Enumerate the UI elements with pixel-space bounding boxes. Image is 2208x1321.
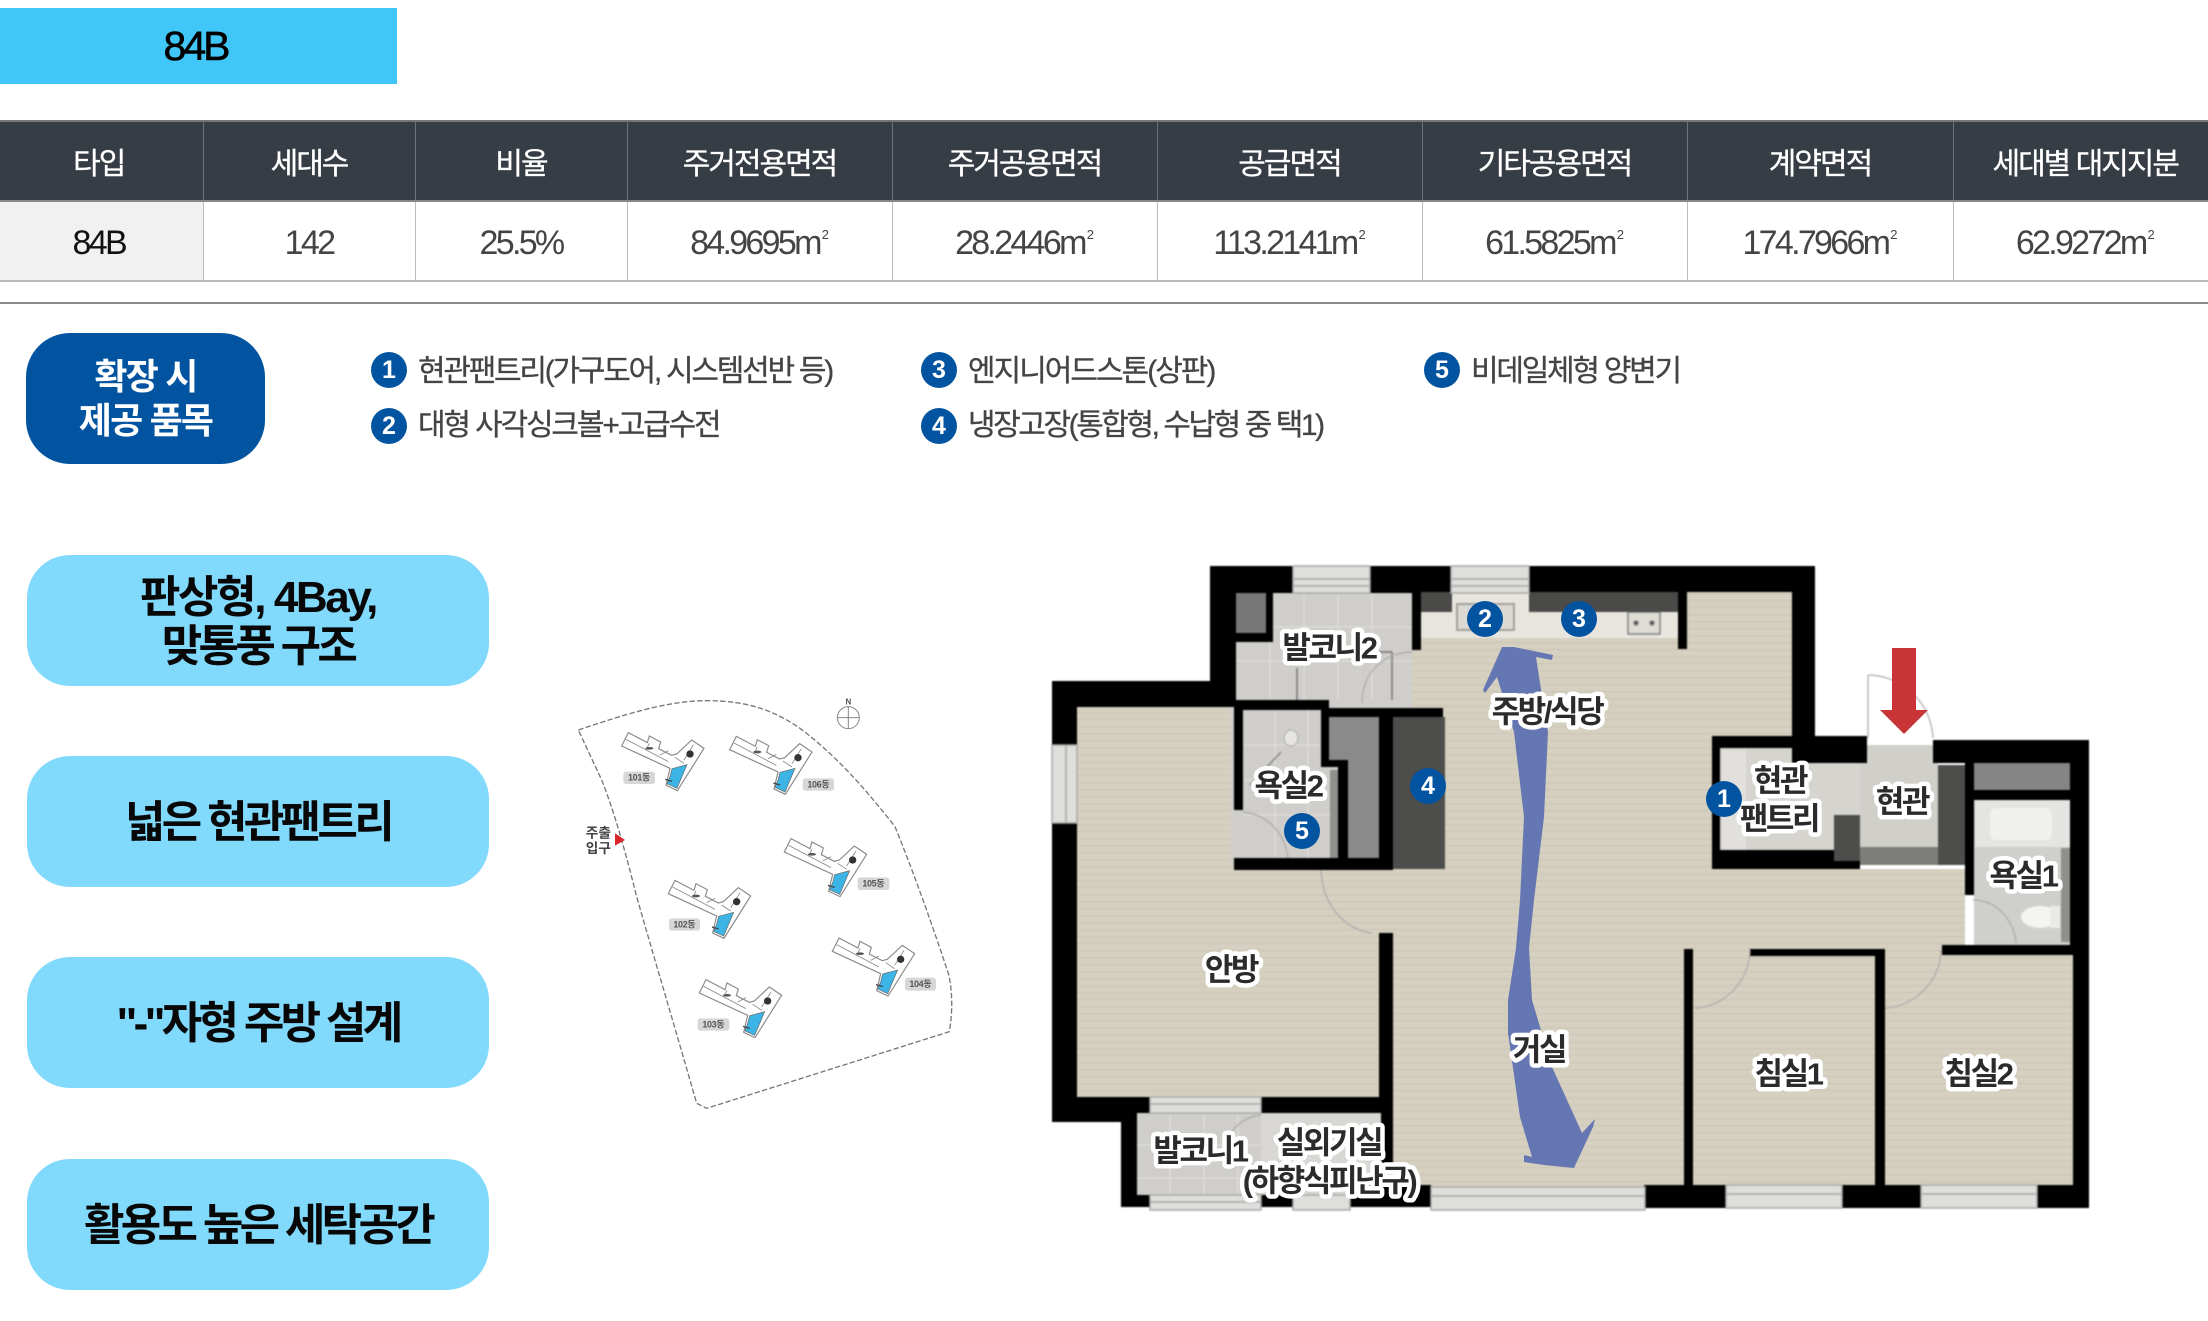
building label 101: 101동 — [628, 773, 650, 783]
area table: 28.2446m2 — [955, 224, 1094, 262]
entrance shoe cabinet — [1938, 765, 1965, 865]
marker 5 — [1284, 813, 1320, 849]
building label 102 — [669, 918, 700, 931]
main entrance label: 주출 — [586, 825, 611, 840]
feature pill: kitchen — [27, 957, 489, 1088]
pantry cabinet — [1834, 815, 1860, 861]
counter — [1420, 592, 1680, 638]
room labels: 안방 — [1205, 952, 1259, 988]
feature pill: laundry — [27, 1159, 489, 1290]
feature pill: kitchen: "-"자형 주방 설계 — [116, 999, 400, 1048]
text: 엔지니어드스톤(상판) — [968, 355, 1214, 388]
area table: 세대별 대지지분 — [1992, 148, 2178, 181]
text: 현관팬트리(가구도어, 시스템선반 등) — [418, 355, 832, 388]
legend item 3 — [921, 352, 1215, 388]
entrance floor — [1860, 745, 1938, 847]
text: 5 — [1435, 356, 1449, 384]
marker 2 — [1467, 601, 1503, 637]
area table — [0, 120, 2208, 282]
refrigerator cabinet — [1393, 717, 1445, 869]
badge: items provided with extension — [26, 333, 265, 464]
legend item 5 — [1424, 352, 1680, 388]
building label 105: 105동 — [862, 879, 884, 889]
site boundary — [578, 701, 952, 1108]
feature pill: layout — [27, 555, 489, 686]
balcony 1 floor — [1137, 1113, 1261, 1198]
marker 3 — [1561, 601, 1597, 637]
entrance marker — [615, 833, 625, 846]
building label 106 — [803, 778, 834, 791]
room labels: 발코니2 — [1282, 630, 1377, 666]
marker 4 — [1410, 768, 1446, 804]
marker 1 — [1706, 781, 1742, 817]
building label 102: 102동 — [673, 919, 695, 929]
area table: 25.5% — [480, 224, 562, 262]
room labels: 주방/식당 — [1492, 694, 1604, 730]
feature pill: pantry: 넓은 현관팬트리 — [125, 798, 391, 847]
area table: 62.9272m2 — [2016, 224, 2155, 262]
type tab: 84B: 84B — [164, 23, 227, 69]
area table: 계약면적 — [1769, 148, 1871, 181]
feature pill: pantry — [27, 756, 489, 887]
building label 101 — [623, 772, 655, 784]
balcony 2 floor — [1236, 593, 1412, 708]
area table: 세대수 — [271, 148, 347, 181]
marker 1: 1 — [1717, 785, 1731, 813]
windows — [1052, 566, 2037, 1210]
legend item 1 — [371, 352, 832, 388]
text: 냉장고장(통합형, 수납형 중 택1) — [968, 409, 1323, 442]
sink — [1457, 604, 1514, 630]
legend item 4 — [921, 408, 1324, 444]
marker 3: 3 — [1572, 605, 1586, 633]
main entrance label — [586, 825, 611, 856]
room labels: 침실1 — [1754, 1056, 1824, 1092]
bathroom 2 floor — [1230, 708, 1340, 860]
area table: 84.9695m2 — [690, 224, 829, 262]
building label 105 — [858, 877, 889, 890]
room labels: 팬트리 — [1740, 802, 1818, 836]
room labels: (하향식피난구) — [1243, 1164, 1416, 1198]
feature pill: layout: 판상형, 4Bay, — [140, 572, 376, 622]
room labels: 실외기실 — [1277, 1126, 1381, 1160]
area table: 비율 — [495, 148, 547, 181]
legend item 2 — [371, 408, 720, 444]
text: 4 — [932, 412, 946, 440]
main entrance label: 입구 — [586, 841, 611, 856]
cooktop — [1628, 612, 1660, 634]
text: 3 — [932, 356, 946, 384]
room labels: 현관 — [1754, 764, 1808, 798]
room labels: 현관 — [1876, 784, 1930, 820]
building label 103 — [698, 1018, 729, 1031]
entry arrow — [1880, 648, 1928, 734]
floor plan — [1052, 566, 2089, 1210]
marker 5: 5 — [1295, 817, 1309, 845]
buildings — [622, 733, 915, 1038]
area table: 기타공용면적 — [1478, 148, 1631, 181]
marker 2: 2 — [1478, 605, 1492, 633]
building label 104: 104동 — [909, 979, 931, 989]
area table: 142 — [285, 224, 333, 262]
bathroom 1 floor — [1974, 800, 2070, 946]
text: 비데일체형 양변기 — [1471, 355, 1680, 388]
area table: 주거전용면적 — [683, 148, 836, 181]
feature pill: laundry: 활용도 높은 세탁공간 — [84, 1201, 432, 1250]
room labels: 거실 — [1513, 1032, 1565, 1068]
airflow arrow — [1483, 647, 1595, 1168]
feature pill: layout: 맞통풍 구조 — [162, 622, 354, 670]
room labels: 욕실1 — [1989, 858, 2059, 894]
badge: items provided with extension: 확장 시 — [94, 356, 197, 396]
room labels — [1153, 630, 2059, 1198]
walls — [1052, 566, 2089, 1208]
north compass — [837, 697, 859, 729]
text: 2 — [382, 412, 396, 440]
badge: items provided with extension: 제공 품목 — [79, 400, 212, 440]
pantry floor — [1720, 748, 1862, 851]
area table: 84B — [73, 224, 125, 262]
building label 106: 106동 — [807, 779, 829, 789]
room labels: 침실2 — [1944, 1056, 2013, 1092]
text: 1 — [382, 356, 396, 384]
building label 104 — [905, 978, 936, 991]
building label 103: 103동 — [702, 1019, 724, 1029]
area table: 174.7966m2 — [1742, 224, 1898, 262]
area table: 타입 — [73, 148, 124, 181]
north compass: N — [845, 697, 851, 706]
gray shafts — [1329, 715, 1379, 858]
doors — [1226, 652, 2016, 1150]
area table: 113.2141m2 — [1213, 224, 1366, 262]
site plan — [578, 697, 952, 1108]
marker 4: 4 — [1421, 772, 1435, 800]
area table: 주거공용면적 — [948, 148, 1101, 181]
room labels: 발코니1 — [1153, 1134, 1249, 1168]
area table: 공급면적 — [1238, 148, 1341, 181]
room labels: 욕실2 — [1254, 768, 1323, 804]
kitchen cabinets — [1421, 592, 1678, 612]
area table: 61.5825m2 — [1485, 224, 1624, 262]
floor plan base — [1052, 566, 2089, 1210]
type tab: 84B — [0, 8, 397, 84]
outdoor unit room floor — [1261, 1113, 1381, 1197]
text: 대형 사각싱크볼+고급수전 — [418, 409, 720, 442]
